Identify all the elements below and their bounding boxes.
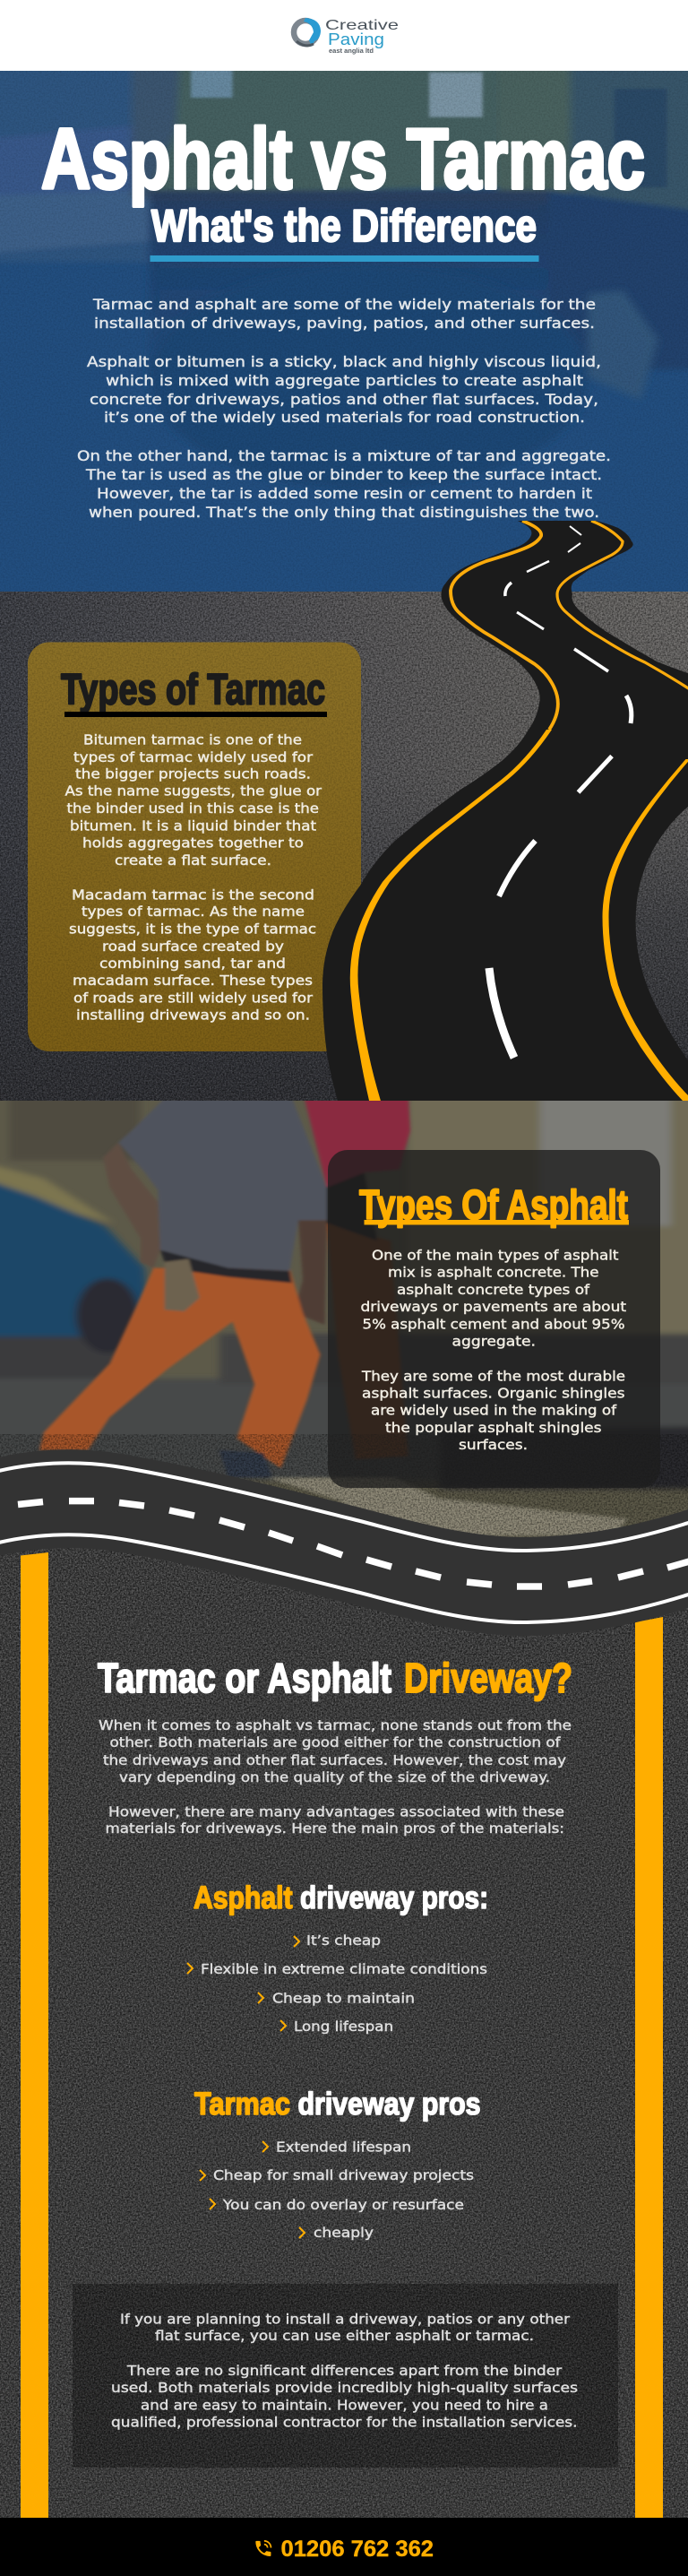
conclusion paragraph 1: flat surface, you can use either asphalt or tarmac. (155, 2328, 534, 2344)
hero panel (0, 59, 688, 592)
heading: asphalt driveway pros (194, 1880, 488, 1915)
organic shingles text: the popular asphalt shingles (385, 1420, 602, 1436)
conclusion paragraph 2 (111, 2363, 578, 2431)
conclusion paragraph 1: If you are planning to install a driveway, patios or any other (120, 2311, 571, 2327)
macadam tarmac text: suggests, it is the type of tarmac (69, 921, 316, 938)
right yellow stripe (635, 1617, 663, 2518)
left yellow stripe (21, 1552, 48, 2518)
heading: tarmac or asphalt driveway: Tarmac or Asphalt (98, 1655, 391, 1701)
organic shingles text (361, 1368, 625, 1453)
footer bar (0, 2518, 688, 2576)
conclusion paragraph 2: qualified, professional contractor for the installation services. (111, 2415, 577, 2431)
asphalt concrete text: mix is asphalt concrete. The (388, 1264, 598, 1280)
macadam tarmac text: Macadam tarmac is the second (72, 887, 314, 903)
right yellow road edge line (557, 521, 688, 1101)
macadam tarmac text: macadam surface. These types (73, 972, 313, 989)
panel: conclusion box (73, 2284, 618, 2468)
intro paragraph 2: it’s one of the widely used materials for road construction. (104, 409, 585, 426)
subtitle: What's the Difference (151, 201, 537, 251)
asphalt concrete text: aggregate. (452, 1334, 536, 1350)
hero background photo: road roller (0, 59, 688, 592)
logo (294, 18, 399, 55)
intro paragraph 2: concrete for driveways, patios and other flat surfaces. Today, (90, 391, 598, 408)
logo: Creative (325, 18, 399, 33)
conclusion paragraph 1 (120, 2311, 571, 2344)
bitumen tarmac text: create a flat surface. (115, 852, 271, 869)
intro paragraph 1 (92, 296, 596, 332)
list: tarmac pros (200, 2139, 474, 2241)
heading: tarmac or asphalt driveway: Driveway? (404, 1655, 572, 1701)
macadam tarmac text (69, 887, 316, 1024)
logo: east anglia ltd (329, 48, 374, 55)
bitumen tarmac text: holds aggregates together to (82, 835, 304, 851)
bitumen tarmac text (64, 731, 322, 869)
driveway intro paragraph 2: materials for driveways. Here the main pros of the materials: (106, 1820, 564, 1837)
photo of road workers (0, 1089, 688, 1567)
heading: types of asphalt: Types Of Asphalt (359, 1181, 628, 1228)
winding road illustration (322, 521, 688, 1102)
bitumen tarmac text: As the name suggests, the glue or (64, 783, 322, 800)
white centre dashes (489, 526, 632, 1058)
driveway intro paragraph 2: However, there are many advantages associated with these (108, 1803, 564, 1820)
driveway intro paragraph 2 (106, 1803, 564, 1837)
asphalt background (0, 592, 688, 1101)
horizontal winding road band (0, 1449, 688, 1636)
heading: asphalt driveway pros: Asphalt (194, 1880, 293, 1915)
list: asphalt pros: It’s cheap (306, 1932, 381, 1949)
driveway intro paragraph 1: vary depending on the quality of the size of the driveway. (119, 1769, 550, 1785)
heading: tarmac driveway pros: driveway pros (297, 2087, 480, 2122)
left yellow road edge line (350, 521, 558, 1102)
logo: Paving (328, 30, 384, 48)
list: asphalt pros: Long lifespan (294, 2018, 393, 2035)
heading: types of tarmac: Types of Tarmac (61, 667, 325, 713)
bitumen tarmac text: types of tarmac widely used for (73, 749, 314, 765)
panel: driveway comparison section (0, 1449, 688, 2518)
macadam tarmac text: installing driveways and so on. (76, 1007, 310, 1024)
organic shingles text: They are some of the most durable (361, 1368, 625, 1384)
conclusion paragraph 2: There are no significant differences apart from the binder (126, 2363, 563, 2379)
list: asphalt pros: Flexible in extreme climate conditions (201, 1961, 487, 1977)
heading underline (64, 712, 327, 717)
intro paragraph 2 (87, 353, 601, 426)
list: tarmac pros: cheaply (314, 2225, 374, 2241)
list: asphalt pros: Cheap to maintain (272, 1990, 415, 2006)
intro paragraph 3: However, the tar is added some resin or cement to harden it (97, 485, 592, 502)
intro paragraph 3: The tar is used as the glue or binder to keep the surface intact. (85, 466, 602, 483)
subtitle underline (150, 255, 539, 262)
panel: types of tarmac section (0, 592, 688, 1101)
heading: tarmac driveway pros: Tarmac (194, 2087, 290, 2122)
heading: tarmac driveway pros (194, 2087, 480, 2122)
asphalt concrete text: asphalt concrete types of (397, 1282, 590, 1298)
intro paragraph 3: when poured. That’s the only thing that distinguishes the two. (89, 504, 599, 521)
conclusion paragraph 2: and are easy to maintain. However, you need to hire a (141, 2397, 548, 2413)
asphalt concrete text: One of the main types of asphalt (372, 1248, 618, 1264)
page header (0, 0, 688, 71)
macadam tarmac text: road surface created by (102, 938, 284, 955)
phone number: 01206 762 362 (281, 2537, 434, 2562)
heading: asphalt driveway pros: driveway pros: (300, 1880, 488, 1915)
intro paragraph 3 (77, 447, 611, 521)
driveway intro paragraph 1: the driveways and other flat surfaces. However, the cost may (103, 1752, 566, 1768)
bitumen tarmac text: bitumen. It is a liquid binder that (70, 817, 316, 834)
organic shingles text: are widely used in the making of (371, 1402, 617, 1418)
list: tarmac pros: Extended lifespan (276, 2139, 411, 2155)
asphalt concrete text (360, 1248, 626, 1350)
list: asphalt pros (187, 1932, 487, 2035)
organic shingles text: surfaces. (459, 1437, 528, 1453)
dark asphalt background (0, 1546, 688, 2518)
heading underline (364, 1220, 629, 1224)
driveway intro paragraph 1 (99, 1717, 572, 1785)
asphalt concrete text: driveways or pavements are about (360, 1299, 626, 1315)
panel: types of tarmac card (28, 642, 361, 1051)
asphalt concrete text: 5% asphalt cement and about 95% (362, 1316, 625, 1332)
conclusion paragraph 2: used. Both materials provide incredibly high-quality surfaces (111, 2380, 578, 2396)
intro paragraph 1: Tarmac and asphalt are some of the widely materials for the (92, 296, 596, 313)
intro paragraph 2: Asphalt or bitumen is a sticky, black and highly viscous liquid, (87, 353, 601, 370)
panel: types of asphalt section (0, 1089, 688, 1567)
driveway intro paragraph 1: other. Both materials are good either for the construction of (109, 1734, 561, 1750)
macadam tarmac text: of roads are still widely used for (73, 990, 314, 1006)
intro paragraph 2: which is mixed with aggregate particles to create asphalt (106, 372, 583, 389)
bitumen tarmac text: the binder used in this case is the (66, 800, 319, 817)
macadam tarmac text: types of tarmac. As the name (82, 903, 305, 920)
list: tarmac pros: Cheap for small driveway projects (213, 2167, 474, 2183)
macadam tarmac text: combining sand, tar and (99, 955, 286, 972)
list: tarmac pros: You can do overlay or resurface (222, 2197, 464, 2213)
bitumen tarmac text: Bitumen tarmac is one of the (83, 731, 302, 748)
organic shingles text: asphalt surfaces. Organic shingles (362, 1386, 625, 1402)
icon: phone (255, 2541, 271, 2556)
intro paragraph 1: installation of driveways, paving, patios, and other surfaces. (94, 315, 595, 332)
bitumen tarmac text: the bigger projects such roads. (75, 765, 311, 782)
panel: types of asphalt card (328, 1150, 660, 1488)
driveway intro paragraph 1: When it comes to asphalt vs tarmac, none stands out from the (99, 1717, 572, 1733)
intro paragraph 3: On the other hand, the tarmac is a mixture of tar and aggregate. (77, 447, 611, 464)
